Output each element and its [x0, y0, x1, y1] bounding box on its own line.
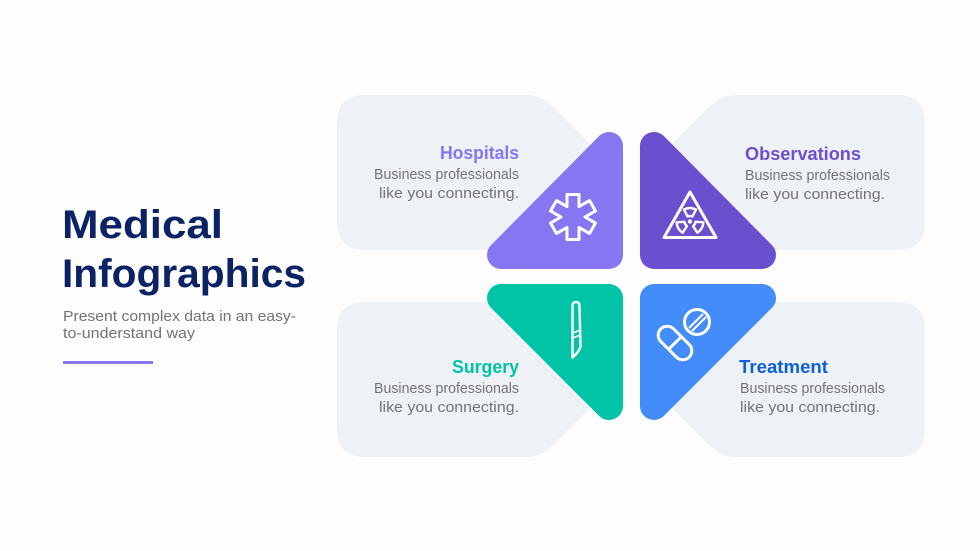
heading: Observations [745, 143, 861, 164]
body text: like you connecting. [740, 400, 880, 416]
body text: Business professionals [374, 381, 519, 397]
title: Infographics [62, 252, 306, 296]
title [62, 203, 306, 296]
heading: Surgery [452, 356, 520, 377]
body text [745, 168, 890, 203]
subtitle: to-understand way [63, 325, 196, 342]
triangle [501, 298, 609, 406]
accent bar [63, 361, 153, 364]
panel: hospitals [337, 95, 609, 255]
heading: Hospitals [440, 142, 519, 163]
body text: Business professionals [374, 167, 519, 183]
panel: surgery [337, 298, 609, 457]
triangle [654, 146, 762, 255]
body text [374, 381, 519, 416]
triangle [654, 298, 762, 406]
heading: Treatment [739, 356, 828, 377]
body text: Business professionals [740, 381, 885, 397]
body text: Business professionals [745, 168, 890, 184]
icon: medical star [551, 194, 595, 240]
body text: like you connecting. [379, 400, 519, 416]
title: Medical [62, 203, 223, 247]
panel: observations [654, 95, 925, 255]
body text [740, 381, 885, 416]
card background [337, 302, 600, 457]
icon: pills [654, 310, 710, 364]
card background [662, 95, 925, 250]
subtitle: Present complex data in an easy- [63, 308, 296, 325]
triangle [501, 146, 609, 255]
body text [374, 167, 519, 202]
icon: scalpel [572, 302, 580, 358]
body text: like you connecting. [745, 187, 885, 203]
subtitle [63, 308, 296, 342]
card background [337, 95, 600, 250]
card background [662, 302, 925, 457]
body text: like you connecting. [379, 186, 519, 202]
panel: treatment [654, 298, 925, 457]
icon: radiation warning [664, 192, 716, 238]
